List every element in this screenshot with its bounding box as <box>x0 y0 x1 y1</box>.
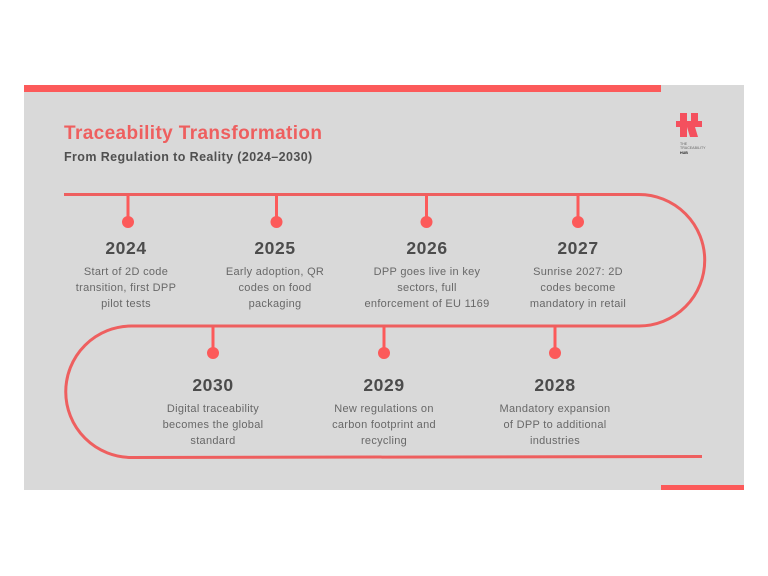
milestone: 2030 <box>163 375 263 447</box>
subtitle: From Regulation to Reality (2024–2030) <box>64 150 313 164</box>
milestone: 2029: 2029 <box>363 375 405 395</box>
milestone: 2028: of DPP to additional <box>503 419 607 431</box>
top accent bar <box>24 85 661 92</box>
milestone: 2029: recycling <box>361 435 407 447</box>
milestone: 2027: Sunrise 2027: 2D <box>533 266 623 278</box>
milestone: 2026: sectors, full <box>397 282 457 294</box>
milestone: 2025: packaging <box>249 298 301 310</box>
milestone: 2027: 2027 <box>557 238 599 258</box>
icon: logo: THE <box>680 142 687 146</box>
milestone: 2026: enforcement of EU 1169 <box>364 298 490 310</box>
milestone: 2030: Digital traceability <box>167 402 259 414</box>
milestone: 2026: DPP goes live in key <box>374 266 480 278</box>
milestone: 2030: becomes the global <box>163 419 263 431</box>
title: Traceability Transformation <box>64 123 322 144</box>
milestone: 2027 <box>530 238 626 310</box>
milestone: 2024: 2024 <box>105 238 147 258</box>
milestone: 2025: Early adoption, QR <box>226 266 324 278</box>
milestone: 2029: carbon footprint and <box>332 419 436 431</box>
milestone: 2028: 2028 <box>534 375 576 395</box>
milestone: 2029 <box>332 375 436 447</box>
milestone: 2025: 2025 <box>254 238 296 258</box>
milestone: 2024: Start of 2D code <box>84 266 168 278</box>
milestone: 2026: 2026 <box>406 238 448 258</box>
milestone: 2030: 2030 <box>192 375 234 395</box>
milestone: 2025: codes on food <box>238 282 312 294</box>
panel: background <box>24 85 744 490</box>
icon: logo: HUB <box>680 151 688 155</box>
milestone: 2027: codes become <box>540 282 616 294</box>
icon: logo <box>676 113 706 155</box>
bottom accent bar <box>661 485 744 490</box>
milestone: 2024 <box>76 238 176 310</box>
milestone: 2024: transition, first DPP <box>76 282 176 294</box>
milestone: 2025 <box>226 238 324 310</box>
milestone: 2028: Mandatory expansion <box>500 402 610 414</box>
milestone: 2027: mandatory in retail <box>530 298 626 310</box>
milestone: 2030: standard <box>190 435 236 447</box>
milestone: 2024: pilot tests <box>101 298 151 310</box>
milestone: 2026 <box>364 238 490 310</box>
milestone: 2028 <box>500 375 610 447</box>
milestone: 2028: industries <box>530 435 580 447</box>
icon: logo: TRACEABILITY <box>680 146 706 150</box>
milestone: 2029: New regulations on <box>334 402 434 414</box>
